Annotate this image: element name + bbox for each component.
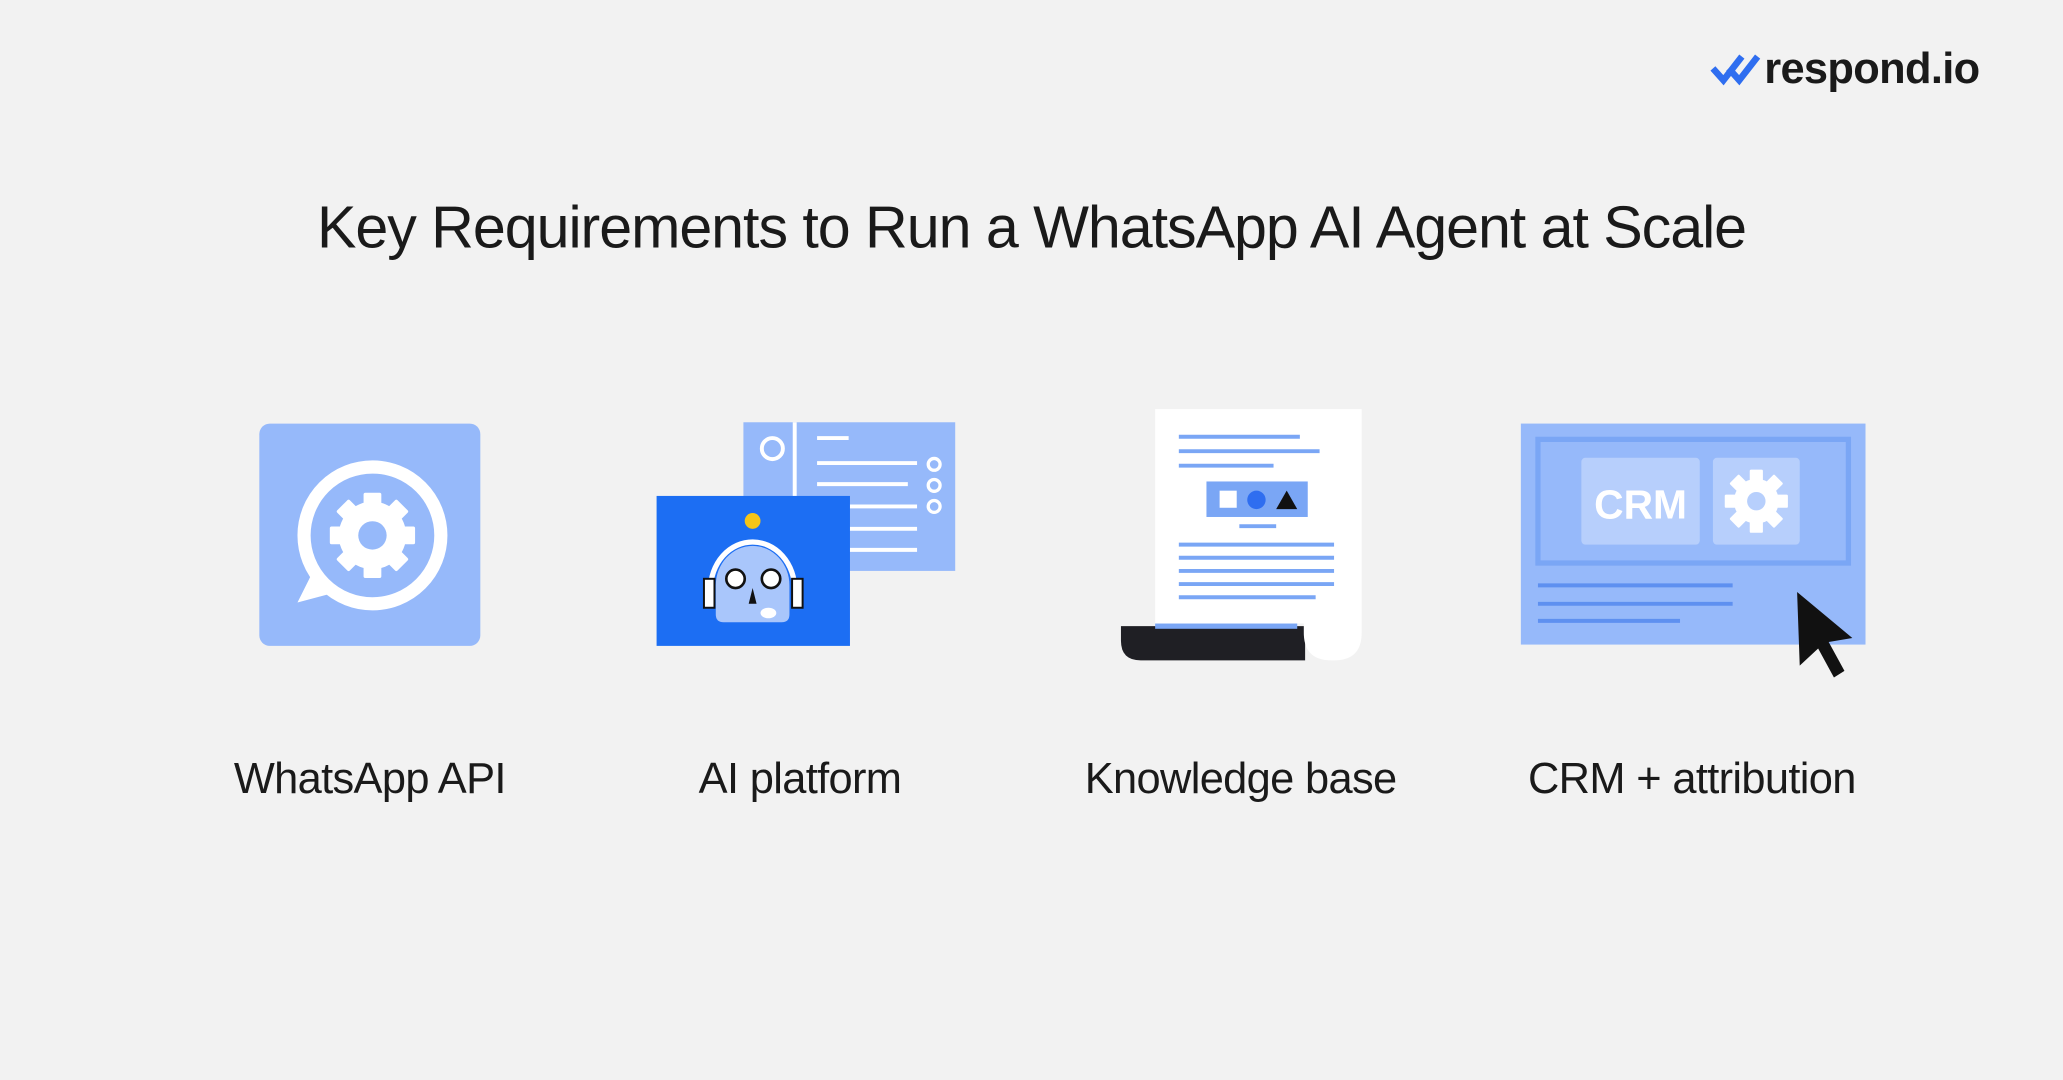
icon: knowledge base <box>1121 409 1362 660</box>
title: Key Requirements to Run a WhatsApp AI Agent at Scale <box>317 193 1746 260</box>
logo: respond.io <box>1764 45 1980 93</box>
label: Knowledge base: Knowledge base <box>1085 755 1397 803</box>
label: AI platform: AI platform <box>699 755 901 803</box>
icon: whatsapp api <box>259 424 480 646</box>
icon: ai platform <box>657 422 955 646</box>
label: CRM + attribution: CRM + attribution <box>1528 755 1856 803</box>
icon: crm attribution: CRM <box>1594 481 1687 527</box>
label: WhatsApp API: WhatsApp API <box>234 755 506 803</box>
icon: crm attribution <box>1521 424 1866 677</box>
